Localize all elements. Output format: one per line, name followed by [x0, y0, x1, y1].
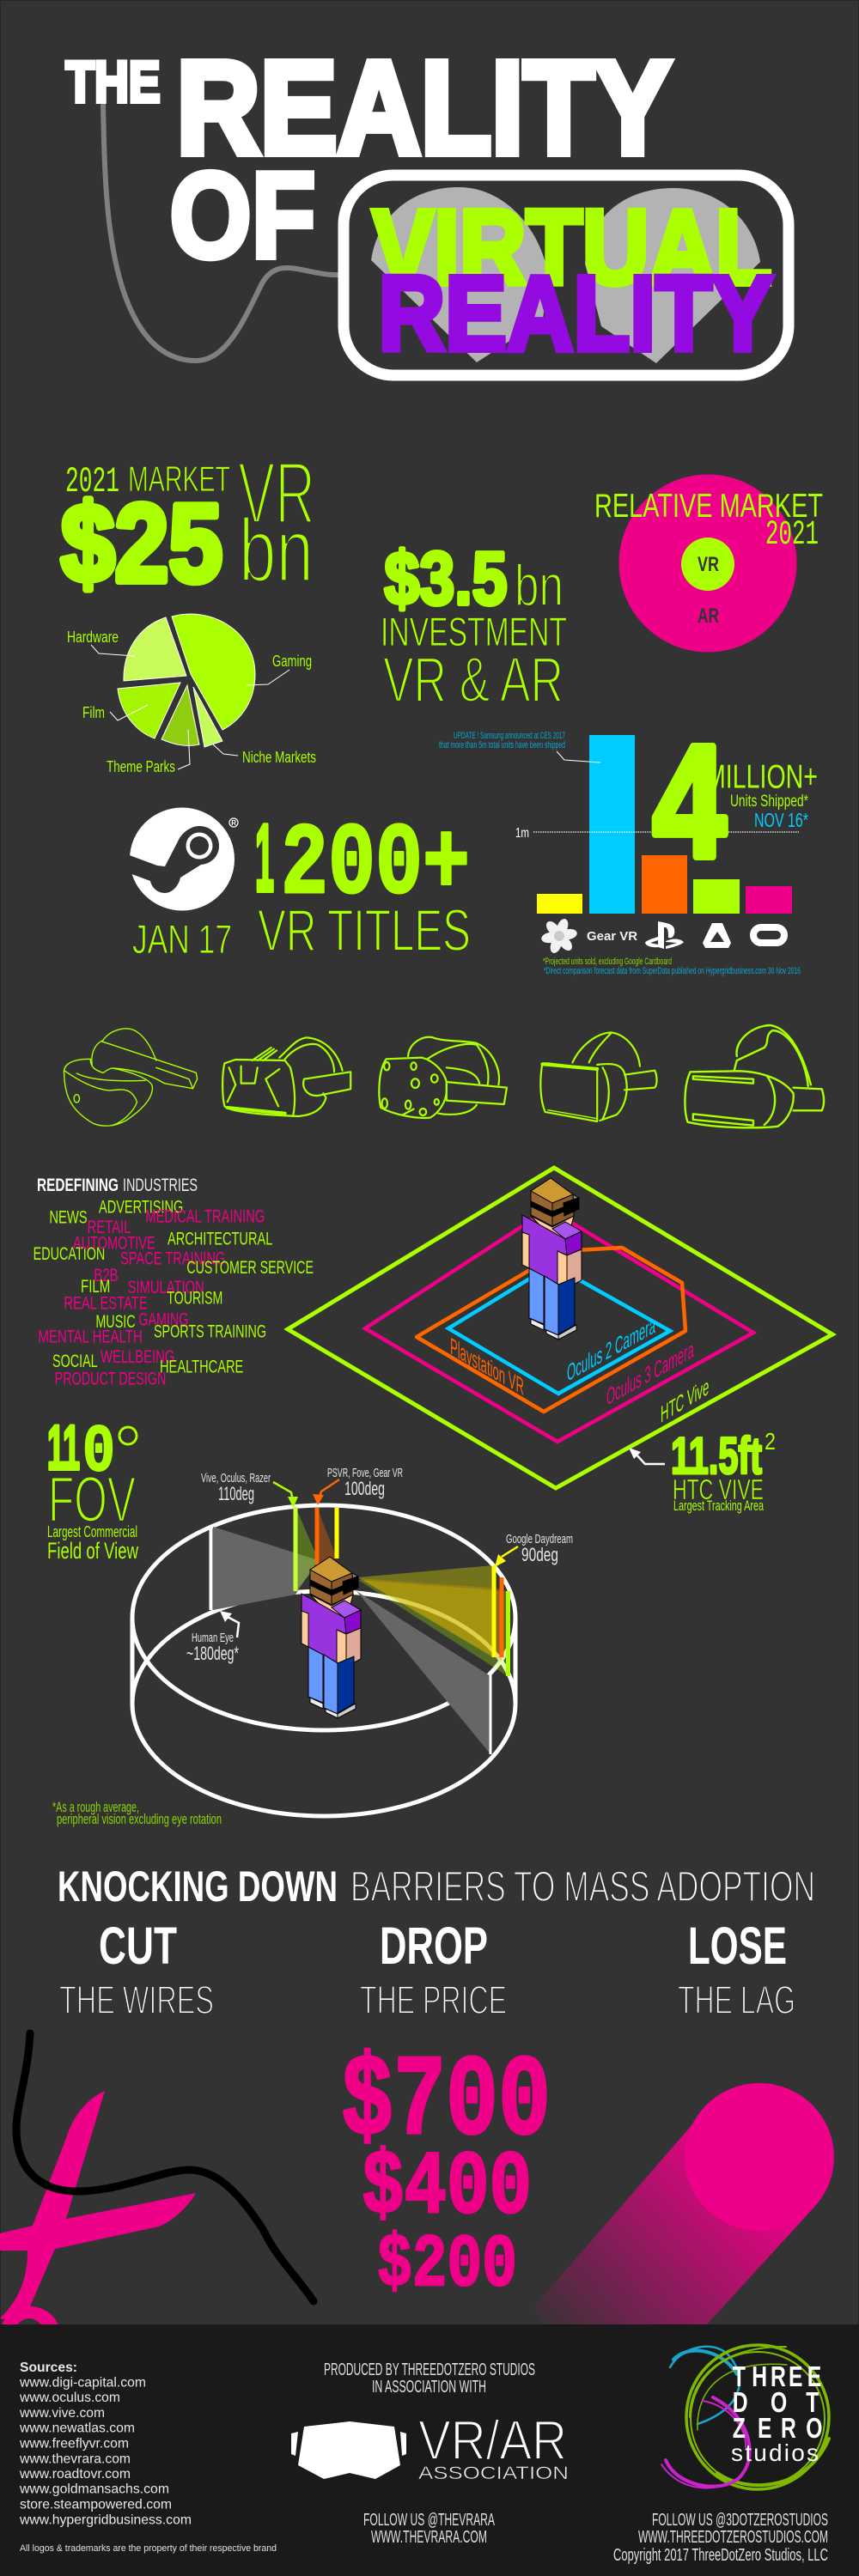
- grey eye lens right: [585, 188, 760, 363]
- produced by: [324, 2360, 535, 2397]
- industry word cloud: WELLBEING: [101, 1347, 174, 1367]
- sources list: Sources:: [20, 2360, 77, 2375]
- panel: barriers to mass adoption: [0, 1862, 834, 2368]
- label group: google daydream: 90deg: [521, 1544, 558, 1565]
- follow vr ara: [363, 2511, 495, 2547]
- slice: theme parks: [161, 685, 199, 745]
- footnote: projected units: *Projected units sold, excluding Google Cardboard: [543, 957, 672, 967]
- industry word cloud: FILM: [81, 1277, 110, 1297]
- sources list: www.freeflyvr.com: [19, 2436, 129, 2451]
- footer: [0, 2324, 859, 2576]
- icon: headset 1: [64, 1029, 198, 1126]
- value 1200+: [255, 805, 470, 923]
- label group: google daydream: Google Daydream: [506, 1532, 573, 1546]
- panel: steam titles: [127, 805, 471, 963]
- icon: steam logo: [127, 807, 235, 910]
- 2021 label: 2021: [65, 461, 119, 502]
- cable: [103, 104, 341, 361]
- update leader: [557, 751, 600, 762]
- follow vr ara: FOLLOW US @THEVRARA: [363, 2511, 495, 2530]
- label group: vive oculus razer: Vive, Oculus, Razer: [201, 1471, 271, 1485]
- label: oculus 2 camera: Oculus 2 Camera: [567, 1311, 655, 1387]
- VR titles label: VR TITLES: [258, 897, 471, 963]
- sources list: www.newatlas.com: [19, 2421, 135, 2436]
- largest tracking area: Largest Tracking Area: [673, 1498, 764, 1514]
- label: niche markets: Niche Markets: [242, 749, 316, 766]
- headset field wedges front: [358, 1565, 509, 1676]
- panel: tracking areas: [288, 1168, 832, 1514]
- industry word cloud: RETAIL: [88, 1218, 131, 1237]
- VR/AR wordmark: VR/AR: [418, 2409, 567, 2471]
- AR circle: [618, 474, 797, 653]
- icon: headset 4: [540, 1032, 657, 1121]
- fov cylinder: [132, 1505, 515, 1816]
- label: hardware: Hardware: [67, 629, 119, 646]
- label group: human eye: Human Eye: [192, 1631, 234, 1645]
- sources list: www.thevrara.com: [19, 2451, 131, 2466]
- value 110 degrees: 0: [82, 1415, 115, 1491]
- produced by: IN ASSOCIATION WITH: [372, 2378, 486, 2397]
- footnote: peripheral vision excluding eye rotation: [57, 1811, 222, 1827]
- bar: gear vr: [589, 735, 635, 914]
- industry word cloud: EDUCATION: [34, 1244, 105, 1264]
- title: REALITY: REALITY: [177, 34, 672, 182]
- industry word cloud: [34, 1197, 314, 1388]
- one million line: [533, 831, 799, 833]
- value $3.5: $3.5: [385, 538, 507, 620]
- label group: vive oculus razer: [201, 1471, 271, 1504]
- industry word cloud: MENTAL HEALTH: [38, 1327, 143, 1347]
- industry word cloud: B2B: [94, 1266, 119, 1285]
- magenta arcs: [661, 2397, 750, 2488]
- column: cut: CUT: [99, 1917, 177, 1975]
- one million label: 1m: [515, 826, 529, 841]
- produced by: PRODUCED BY THREEDOTZERO STUDIOS: [324, 2360, 535, 2379]
- arrow: google daydream: [495, 1546, 518, 1567]
- pie chart: [118, 614, 255, 747]
- icon: wire: [16, 2033, 314, 2301]
- logo: three dot zero wordmark: ZERO: [733, 2414, 823, 2445]
- heading: knocking down: KNOCKING DOWN: [58, 1862, 338, 1911]
- label group: human eye: ~180deg*: [186, 1643, 239, 1664]
- pie leader lines: [91, 645, 289, 769]
- sources list: www.roadtovr.com: [19, 2467, 131, 2482]
- slice: hardware: [124, 617, 186, 681]
- bar chart: units shipped: [439, 713, 818, 976]
- industry word cloud: ADVERTISING: [99, 1197, 183, 1217]
- panel: relative market: [594, 474, 823, 653]
- label group: vive oculus razer: 110deg: [218, 1483, 254, 1504]
- sources list: store.steampowered.com: [20, 2497, 172, 2512]
- VR label: VR: [238, 444, 315, 542]
- icon: playstation: [645, 921, 684, 949]
- heading: redefining: REDEFINING: [37, 1176, 119, 1195]
- follow vr ara: WWW.THEVRARA.COM: [371, 2528, 487, 2547]
- trademark note: All logos & trademarks are the property of their respective brand: [20, 2543, 277, 2554]
- market label: MARKET: [128, 459, 230, 499]
- gear vr label: Gear VR: [587, 929, 637, 944]
- sources list: www.digi-capital.com: [19, 2375, 146, 2390]
- units shipped: Units Shipped*: [730, 793, 808, 811]
- value 110 degrees: 11: [47, 1413, 80, 1483]
- industry word cloud: GAMING: [138, 1309, 188, 1329]
- area: oculus 2 camera: [448, 1265, 670, 1394]
- label group: psvr fove gear vr: 100deg: [344, 1478, 385, 1499]
- bar: playstation: [642, 855, 687, 914]
- grey eye lens left: [371, 187, 548, 362]
- largest commercial: Largest Commercial: [47, 1523, 137, 1540]
- association wordmark: ASSOCIATION: [418, 2464, 569, 2483]
- update note: that more than 5m total units have been shipped: [439, 740, 565, 750]
- industry word cloud: SPACE TRAINING: [120, 1249, 225, 1268]
- update note: UPDATE ! Samsung announced at CES 2017: [454, 731, 565, 741]
- area: htc vive: [288, 1168, 832, 1488]
- bn label: bn: [515, 553, 564, 618]
- panel: redefining industries: [34, 1176, 314, 1388]
- slice: gaming: [172, 614, 255, 730]
- icon: scissors: [0, 2091, 196, 2368]
- subhead: the lag: THE LAG: [678, 1978, 795, 2022]
- industry word cloud: NEWS: [49, 1207, 88, 1227]
- green rings: [686, 2345, 829, 2489]
- million heading: MILLION+: [705, 759, 818, 795]
- price: $200: $200: [377, 2223, 517, 2307]
- label: oculus 3 camera: Oculus 3 Camera: [606, 1336, 694, 1411]
- logo: studios: studios: [731, 2439, 819, 2466]
- AR label: AR: [698, 605, 719, 628]
- blue arcs: [670, 2347, 740, 2424]
- industry word cloud: SIMULATION: [128, 1278, 204, 1297]
- icon: headset 5: [685, 1025, 824, 1127]
- icon: htc vive: [703, 923, 731, 948]
- sources list: www.oculus.com: [19, 2391, 120, 2405]
- industry word cloud: PRODUCT DESIGN: [55, 1369, 166, 1388]
- title block: [65, 34, 789, 375]
- label group: psvr fove gear vr: PSVR, Fove, Gear VR: [327, 1466, 403, 1480]
- icon: headset 3: [379, 1037, 507, 1118]
- slice: film: [118, 683, 180, 738]
- title: OF: OF: [170, 148, 316, 283]
- bar: oculus: [746, 886, 792, 914]
- price: $700: $700: [341, 2038, 551, 2167]
- FOV label: FOV: [48, 1463, 136, 1535]
- icon: registered mark: R: [231, 819, 236, 827]
- headset field wedges rear: [295, 1507, 337, 1591]
- industry word cloud: SOCIAL: [52, 1352, 98, 1371]
- industry word cloud: MEDICAL TRAINING: [145, 1206, 265, 1226]
- label: gaming: Gaming: [272, 653, 312, 670]
- VR and AR label: VR & AR: [383, 644, 564, 715]
- area: oculus 3 camera: [365, 1209, 753, 1442]
- VR label: VR: [698, 553, 719, 576]
- arrow: vive oculus razer: [273, 1482, 298, 1508]
- panel: field of view: [47, 1413, 573, 1827]
- icon: lag trail: [534, 2123, 816, 2324]
- date: NOV 16*: [754, 809, 808, 831]
- big digit 4: 4: [653, 713, 726, 891]
- footnote: *As a rough average,: [52, 1799, 139, 1815]
- footer background: [0, 2324, 859, 2576]
- title: VIRTUAL: VIRTUAL: [373, 189, 771, 307]
- label: film: Film: [82, 704, 105, 721]
- icon: registered mark: [229, 818, 238, 827]
- headset illustrations row: [64, 1025, 824, 1127]
- area: playstation vr: [417, 1248, 685, 1412]
- industry word cloud: MUSIC: [95, 1312, 136, 1332]
- value 1200+: 200+: [281, 809, 470, 923]
- industry word cloud: AUTOMOTIVE: [73, 1233, 155, 1253]
- person with headset: [522, 1178, 582, 1340]
- follow three dot zero: [613, 2511, 828, 2565]
- logo: three dot zero wordmark: THREE: [733, 2362, 821, 2393]
- value $25: $25: [61, 482, 222, 605]
- panel: 2021 market: [61, 444, 315, 605]
- industry word cloud: REAL ESTATE: [64, 1293, 148, 1313]
- sources list: [19, 2360, 192, 2527]
- label group: psvr fove gear vr: [327, 1466, 403, 1499]
- subhead: the wires: THE WIRES: [59, 1978, 214, 2022]
- investment label: INVESTMENT: [381, 609, 567, 654]
- arrow: human eye: [220, 1611, 239, 1637]
- icon: fove pinwheel: [540, 917, 578, 955]
- heading: industries: INDUSTRIES: [123, 1176, 198, 1195]
- footnote: [52, 1799, 222, 1827]
- column: lose: LOSE: [688, 1917, 787, 1975]
- icon: oculus: [753, 927, 784, 943]
- VR circle: [681, 538, 734, 591]
- title: THE: THE: [65, 50, 160, 115]
- value 11.5ft squared: 2: [765, 1428, 776, 1455]
- industry word cloud: ARCHITECTURAL: [168, 1229, 272, 1249]
- slice: niche markets: [193, 687, 222, 747]
- person with headset: [302, 1557, 361, 1718]
- value 110 degrees: [47, 1413, 137, 1491]
- human eye field: [211, 1527, 490, 1754]
- value 1200+: 1: [255, 805, 274, 912]
- date label: JAN 17: [132, 916, 232, 962]
- bn label: bn: [239, 501, 314, 601]
- pie labels: [67, 629, 316, 775]
- logo: three dot zero rings: [661, 2345, 829, 2489]
- label: theme parks: Theme Parks: [107, 758, 175, 775]
- HTC Vive label: HTC VIVE: [673, 1473, 764, 1505]
- column: drop: DROP: [380, 1917, 488, 1975]
- field of view: Field of View: [47, 1538, 138, 1564]
- industry word cloud: SPORTS TRAINING: [154, 1321, 266, 1341]
- sources list: www.goldmansachs.com: [19, 2482, 169, 2497]
- logo: three dot zero wordmark: [733, 2362, 823, 2445]
- icon: lag ball: [685, 2083, 834, 2231]
- headset frame: [344, 175, 789, 375]
- sources list: www.hypergridbusiness.com: [19, 2512, 192, 2527]
- label group: human eye: [186, 1631, 239, 1664]
- sources list: www.vive.com: [19, 2406, 105, 2421]
- label: playstation vr: Playstation VR: [450, 1333, 524, 1400]
- label group: google daydream: [506, 1532, 573, 1565]
- logo: three dot zero wordmark: DOT: [733, 2388, 819, 2419]
- price: $400: $400: [362, 2138, 532, 2239]
- update note: [439, 731, 565, 750]
- icon: headset 2: [222, 1037, 350, 1116]
- bar: htc vive: [693, 879, 740, 914]
- value 11.5ft squared: 11.5ft: [671, 1427, 762, 1485]
- arrow: psvr fove gear vr: [313, 1479, 339, 1505]
- industry word cloud: HEALTHCARE: [160, 1357, 243, 1376]
- panel: investment: [381, 538, 567, 715]
- title: REALITY purple: REALITY: [378, 254, 773, 373]
- subhead: the price: THE PRICE: [360, 1978, 507, 2022]
- label: htc vive: HTC Vive: [661, 1373, 709, 1428]
- bar: fove: [537, 894, 582, 914]
- industry word cloud: CUSTOMER SERVICE: [186, 1258, 314, 1278]
- arrow to htc vive area: [629, 1448, 665, 1464]
- year 2021: 2021: [765, 516, 819, 555]
- industry word cloud: TOURISM: [167, 1288, 222, 1308]
- icon: vr/ar goggles: [291, 2421, 406, 2479]
